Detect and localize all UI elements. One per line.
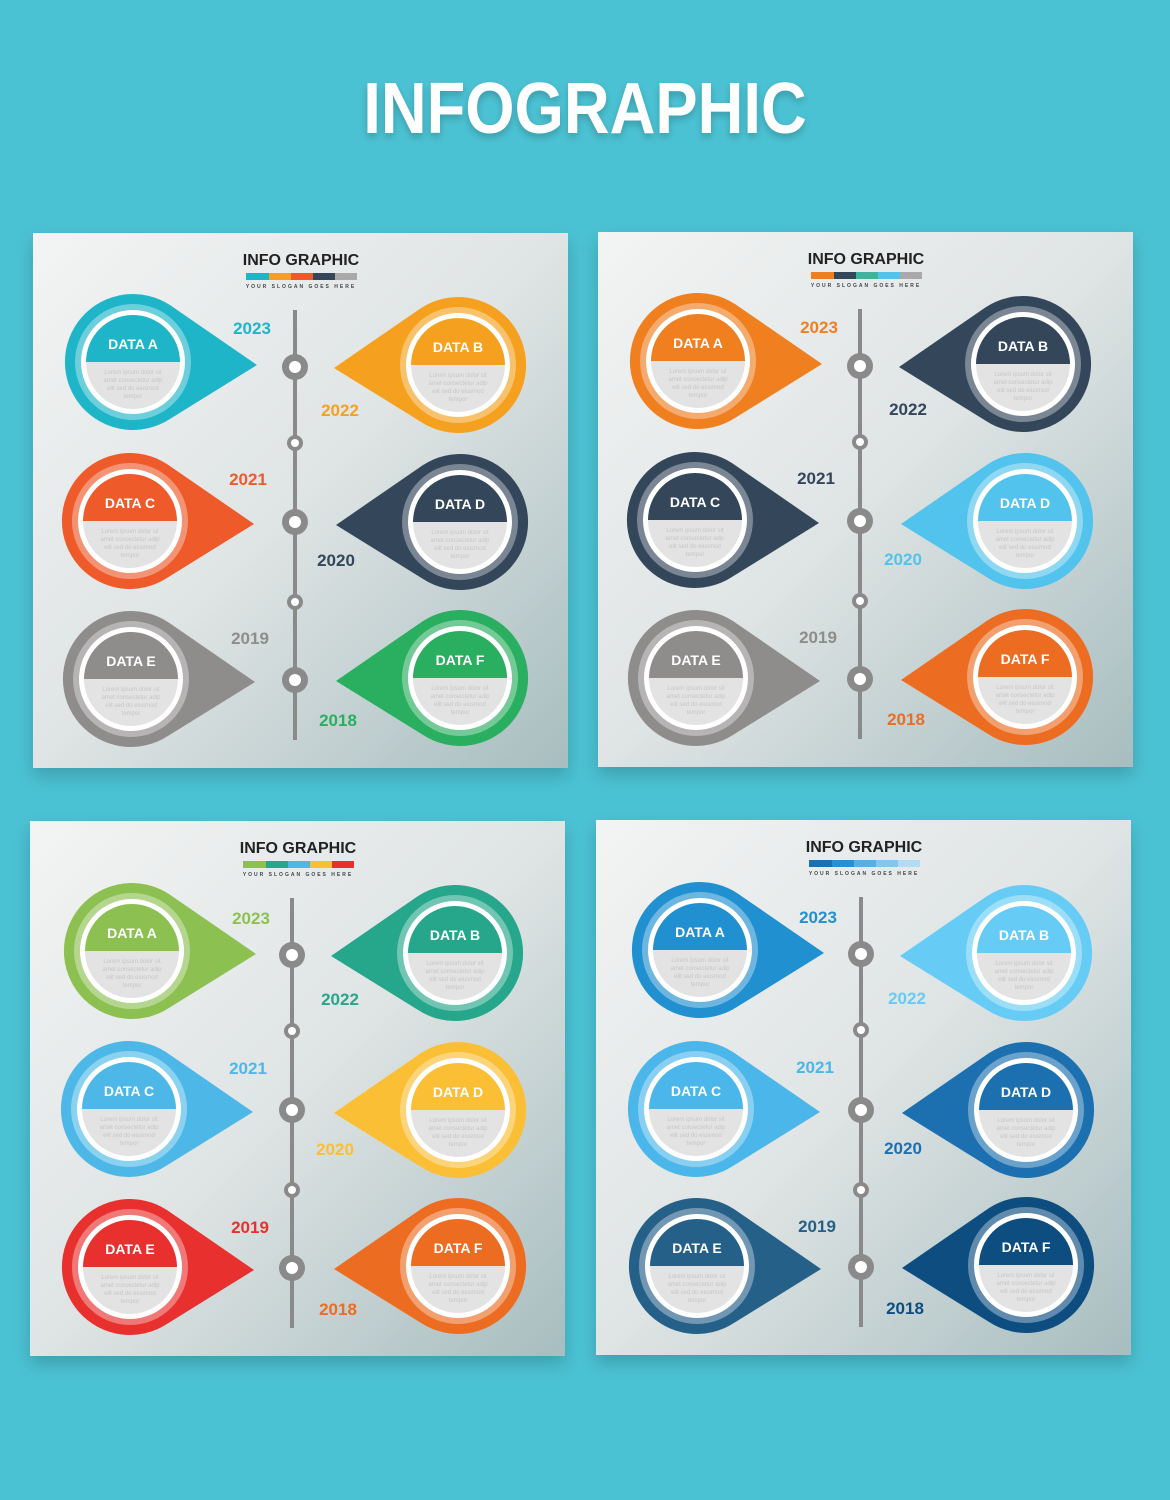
drop: DATA D: tempor [1016,553,1034,559]
drop: DATA A: elit sed do eiusmod [672,385,724,391]
drop: DATA A: elit sed do eiusmod [107,386,159,392]
panel 4 [596,820,1131,1355]
year 2023: 2023 [800,318,838,337]
header [808,251,925,289]
drop: DATA E: DATA E [671,652,721,668]
drop: DATA D [334,1042,526,1178]
drop: DATA E: Lorem ipsum dolor sit [101,1275,159,1281]
drop: DATA F [334,1198,526,1334]
drop: DATA D: Lorem ipsum dolor sit [997,1118,1055,1124]
drop: DATA C: elit sed do eiusmod [670,1133,722,1139]
drop: DATA D: DATA D [1000,495,1050,511]
drop: DATA E: elit sed do eiusmod [104,1291,156,1297]
drop: DATA D: elit sed do eiusmod [432,1134,484,1140]
year 2018: 2018 [887,710,925,729]
drop: DATA A: DATA A [107,925,157,941]
drop: DATA E: elit sed do eiusmod [671,1290,723,1296]
year 2021: 2021 [229,1059,267,1078]
drop: DATA C: DATA C [671,1083,721,1099]
drop: DATA D: Lorem ipsum dolor sit [429,1118,487,1124]
drop: DATA F: elit sed do eiusmod [1000,1289,1052,1295]
header: INFO GRAPHIC [808,251,925,268]
drop: DATA B: DATA B [999,927,1049,943]
drop: DATA E [62,1199,254,1335]
drop: DATA D: tempor [449,1142,467,1148]
panel 2 [598,232,1133,767]
drop: DATA A [630,293,822,429]
year 2022: 2022 [888,989,926,1008]
drop: DATA C: tempor [687,1141,705,1147]
header: YOUR SLOGAN GOES HERE [809,871,919,877]
year 2021: 2021 [797,469,835,488]
header [243,252,360,290]
drop: DATA E [628,610,820,746]
panel 3 [30,821,565,1356]
drop: DATA B [900,885,1092,1021]
drop: DATA A: amet consectetur adip [103,378,163,384]
year 2020: 2020 [316,1140,354,1159]
drop: DATA F: Lorem ipsum dolor sit [431,686,489,692]
drop: DATA B: amet consectetur adip [425,969,485,975]
drop: DATA A: Lorem ipsum dolor sit [671,958,729,964]
drop: DATA A [65,294,257,430]
drop: DATA A: Lorem ipsum dolor sit [669,369,727,375]
drop: DATA A: Lorem ipsum dolor sit [104,370,162,376]
drop: DATA B: tempor [449,397,467,403]
drop: DATA F: tempor [449,1298,467,1304]
drop: DATA E: tempor [122,711,140,717]
drop: DATA D: Lorem ipsum dolor sit [996,529,1054,535]
year 2018: 2018 [319,1300,357,1319]
drop: DATA B: amet consectetur adip [993,380,1053,386]
header [240,840,357,878]
drop: DATA E: DATA E [672,1240,722,1256]
drop: DATA A: tempor [691,982,709,988]
header [806,839,923,877]
drop: DATA B: tempor [446,985,464,991]
drop: DATA D: DATA D [433,1084,483,1100]
drop: DATA E: amet consectetur adip [100,1283,160,1289]
year 2023: 2023 [799,908,837,927]
drop: DATA B: Lorem ipsum dolor sit [995,961,1053,967]
drop: DATA C: amet consectetur adip [100,537,160,543]
drop: DATA B: elit sed do eiusmod [998,977,1050,983]
drop: DATA D: elit sed do eiusmod [1000,1134,1052,1140]
drop: DATA D: tempor [451,554,469,560]
drop: DATA B: tempor [1015,985,1033,991]
drop: DATA D [902,1042,1094,1178]
year 2023: 2023 [233,319,271,338]
drop: DATA F: amet consectetur adip [995,693,1055,699]
drop: DATA B: elit sed do eiusmod [429,977,481,983]
drop: DATA E: DATA E [106,653,156,669]
drop: DATA C: Lorem ipsum dolor sit [667,1117,725,1123]
drop: DATA D: amet consectetur adip [996,1126,1056,1132]
drop: DATA B [899,296,1091,432]
drop: DATA C: Lorem ipsum dolor sit [666,528,724,534]
timeline [279,898,305,1328]
drop: DATA E: amet consectetur adip [667,1282,727,1288]
year 2022: 2022 [889,400,927,419]
drop: DATA B: amet consectetur adip [994,969,1054,975]
drop: DATA D: amet consectetur adip [995,537,1055,543]
drop: DATA C: tempor [120,1141,138,1147]
drop: DATA B: Lorem ipsum dolor sit [429,373,487,379]
timeline [282,310,308,740]
year 2020: 2020 [884,1139,922,1158]
drop: DATA C: amet consectetur adip [665,536,725,542]
drop: DATA D [901,453,1093,589]
header: YOUR SLOGAN GOES HERE [246,284,356,290]
drop: DATA F: DATA F [1002,1239,1051,1255]
drop: DATA A: tempor [689,393,707,399]
drop: DATA F: DATA F [436,652,485,668]
drop: DATA E: elit sed do eiusmod [105,703,157,709]
drop: DATA B: Lorem ipsum dolor sit [994,372,1052,378]
drop: DATA F: elit sed do eiusmod [432,1290,484,1296]
drop: DATA F: DATA F [1001,651,1050,667]
drop: DATA C [628,1041,820,1177]
drop: DATA F: Lorem ipsum dolor sit [997,1273,1055,1279]
drop: DATA A: amet consectetur adip [670,966,730,972]
drop: DATA A: DATA A [675,924,725,940]
drop: DATA B: elit sed do eiusmod [997,388,1049,394]
drop: DATA E: Lorem ipsum dolor sit [102,687,160,693]
drop: DATA F: tempor [1017,1297,1035,1303]
header: YOUR SLOGAN GOES HERE [811,283,921,289]
drop: DATA E: DATA E [105,1241,155,1257]
drop: DATA B: DATA B [430,927,480,943]
drop: DATA C: tempor [686,552,704,558]
drop: DATA E: elit sed do eiusmod [670,702,722,708]
drop: DATA C: DATA C [670,494,720,510]
drop: DATA A [632,882,824,1018]
year 2020: 2020 [884,550,922,569]
drop: DATA B: Lorem ipsum dolor sit [426,961,484,967]
drop: DATA C: DATA C [105,495,155,511]
drop: DATA E: tempor [121,1299,139,1305]
drop: DATA C [62,453,254,589]
drop: DATA E [629,1198,821,1334]
drop: DATA A: elit sed do eiusmod [106,975,158,981]
year 2020: 2020 [317,551,355,570]
drop: DATA F: amet consectetur adip [430,694,490,700]
drop: DATA C: amet consectetur adip [666,1125,726,1131]
year 2021: 2021 [229,470,267,489]
drop: DATA C: Lorem ipsum dolor sit [101,529,159,535]
drop: DATA F: Lorem ipsum dolor sit [996,685,1054,691]
year 2019: 2019 [231,629,269,648]
drop: DATA F [901,609,1093,745]
drop: DATA B [331,885,523,1021]
drop: DATA E: tempor [688,1298,706,1304]
year 2022: 2022 [321,401,359,420]
drop: DATA C: elit sed do eiusmod [104,545,156,551]
drop: DATA A: elit sed do eiusmod [674,974,726,980]
drop: DATA D: elit sed do eiusmod [999,545,1051,551]
drop: DATA F: elit sed do eiusmod [434,702,486,708]
drop: DATA F [336,610,528,746]
year 2018: 2018 [886,1299,924,1318]
drop: DATA B: tempor [1014,396,1032,402]
drop: DATA C [627,452,819,588]
drop: DATA C: DATA C [104,1083,154,1099]
drop: DATA F: amet consectetur adip [996,1281,1056,1287]
drop: DATA A: amet consectetur adip [102,967,162,973]
drop: DATA B: amet consectetur adip [428,381,488,387]
header: INFO GRAPHIC [243,252,360,269]
timeline [848,897,874,1327]
year 2022: 2022 [321,990,359,1009]
drop: DATA C: amet consectetur adip [99,1125,159,1131]
drop: DATA C: elit sed do eiusmod [103,1133,155,1139]
drop: DATA B: DATA B [998,338,1048,354]
drop: DATA F: tempor [451,710,469,716]
drop: DATA A: tempor [123,983,141,989]
drop: DATA A: Lorem ipsum dolor sit [103,959,161,965]
year 2021: 2021 [796,1058,834,1077]
drop: DATA E: amet consectetur adip [666,694,726,700]
header: YOUR SLOGAN GOES HERE [243,872,353,878]
header: INFO GRAPHIC [806,839,923,856]
drop: DATA E: amet consectetur adip [101,695,161,701]
panel 1 [33,233,568,768]
drop: DATA D [336,454,528,590]
drop: DATA C: Lorem ipsum dolor sit [100,1117,158,1123]
drop: DATA B: elit sed do eiusmod [432,389,484,395]
drop: DATA C [61,1041,253,1177]
year 2019: 2019 [799,628,837,647]
drop: DATA E: tempor [687,710,705,716]
drop: DATA A: DATA A [673,335,723,351]
timeline [847,309,873,739]
drop: DATA E [63,611,255,747]
year 2023: 2023 [232,909,270,928]
drop: DATA D: DATA D [435,496,485,512]
drop: DATA F [902,1197,1094,1333]
drop: DATA D: tempor [1017,1142,1035,1148]
drop: DATA A [64,883,256,1019]
drop: DATA B: DATA B [433,339,483,355]
drop: DATA A: DATA A [108,336,158,352]
drop: DATA F: amet consectetur adip [428,1282,488,1288]
drop: DATA F: DATA F [434,1240,483,1256]
year 2018: 2018 [319,711,357,730]
drop: DATA D: amet consectetur adip [428,1126,488,1132]
drop: DATA C: tempor [121,553,139,559]
drop: DATA D: amet consectetur adip [430,538,490,544]
year 2019: 2019 [231,1218,269,1237]
drop: DATA F: elit sed do eiusmod [999,701,1051,707]
drop: DATA C: elit sed do eiusmod [669,544,721,550]
drop: DATA F: tempor [1016,709,1034,715]
drop: DATA A: amet consectetur adip [668,377,728,383]
year 2019: 2019 [798,1217,836,1236]
drop: DATA D: Lorem ipsum dolor sit [431,530,489,536]
drop: DATA D: elit sed do eiusmod [434,546,486,552]
header: INFO GRAPHIC [240,840,357,857]
drop: DATA E: Lorem ipsum dolor sit [667,686,725,692]
drop: DATA E: Lorem ipsum dolor sit [668,1274,726,1280]
drop: DATA A: tempor [124,394,142,400]
drop: DATA B [334,297,526,433]
title: INFOGRAPHIC [363,69,807,149]
drop: DATA D: DATA D [1001,1084,1051,1100]
drop: DATA F: Lorem ipsum dolor sit [429,1274,487,1280]
